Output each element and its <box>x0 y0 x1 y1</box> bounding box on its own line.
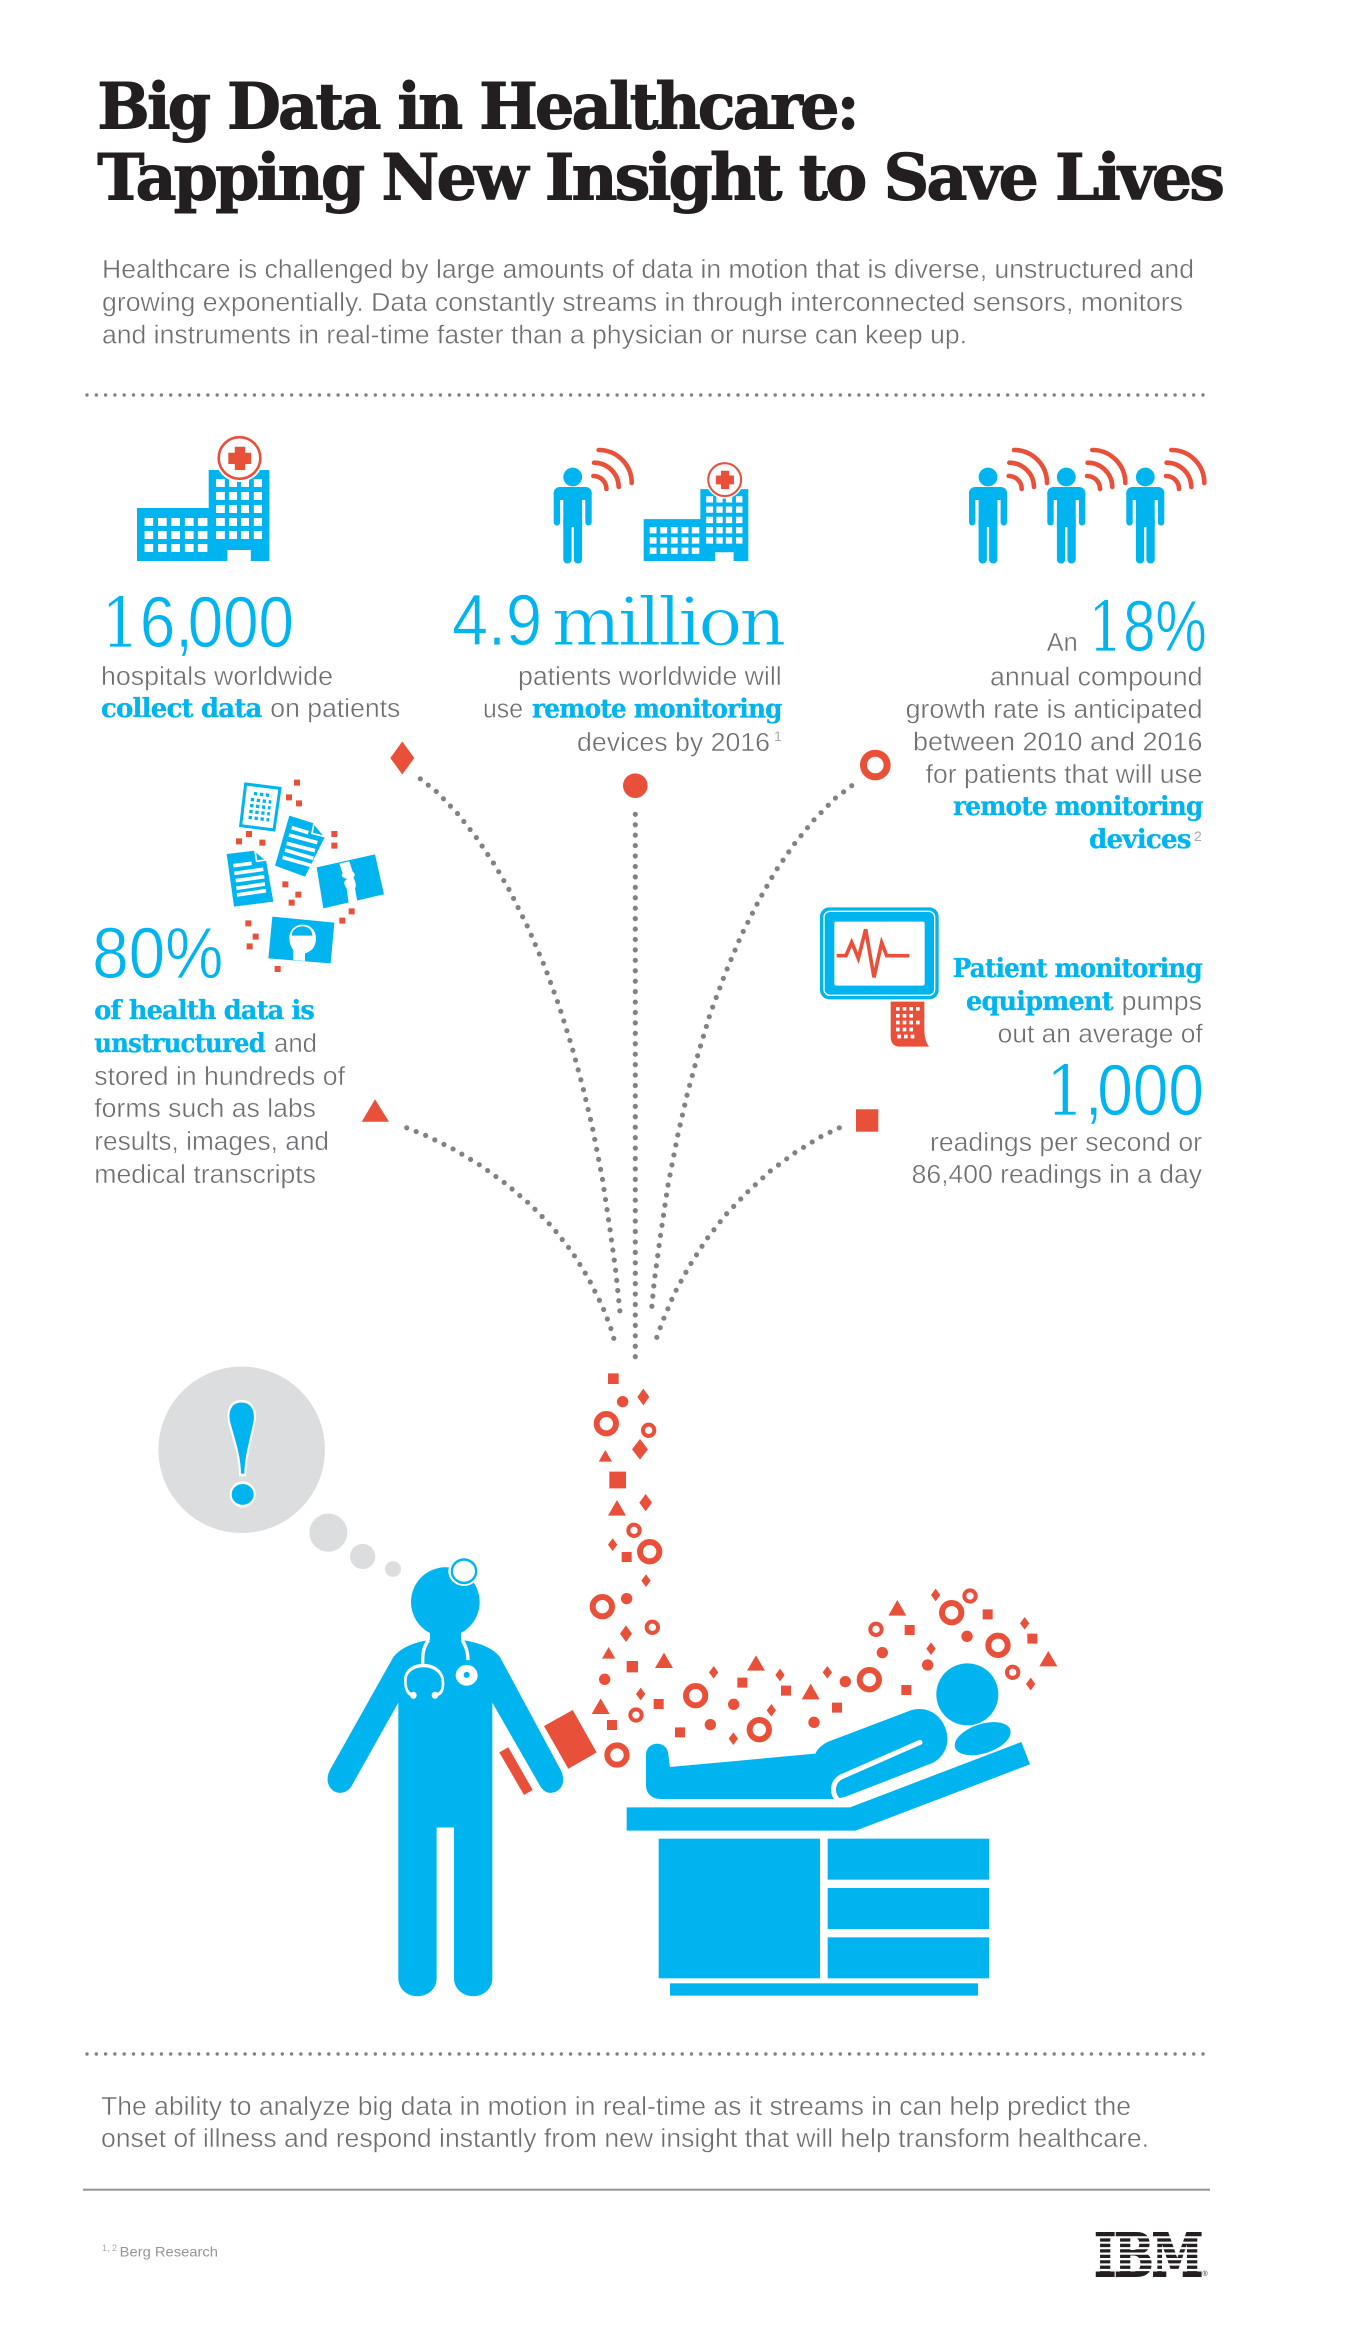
IBM logo: IBM <box>1094 2221 1201 2290</box>
text: hospitals collect data: on patients <box>270 695 400 723</box>
text: readings per second <box>912 1129 1203 1189</box>
panel: patient monitoring 1,000 readings <box>820 907 1204 1189</box>
panel: 16,000 hospitals <box>101 434 400 724</box>
intro text <box>102 256 1194 350</box>
dotted data streams <box>407 779 852 1367</box>
text: health data is unstructured: medical transcripts <box>94 1161 316 1189</box>
text: monitoring equipment pumps <box>953 954 1204 1049</box>
icon: patient monitor <box>820 907 939 1047</box>
text: monitoring equipment pumps: equipment <box>966 987 1113 1017</box>
text: health data is unstructured: of health data is <box>94 996 314 1026</box>
stat: 4.9 million <box>452 581 785 661</box>
stat: An 18% <box>1047 587 1207 668</box>
stat: An 18%: An <box>1047 629 1078 657</box>
panel: 4.9 million patients <box>452 450 785 757</box>
icon: small hospital <box>644 461 748 561</box>
stat: 4.9 million: million <box>552 584 785 661</box>
text: remote monitoring devices by 2016: remote monitoring <box>532 694 782 724</box>
stat: 1,000: 1,000 <box>1046 1051 1204 1132</box>
stat: 16,000: 16,000 <box>101 583 294 664</box>
closing text: onset of illness and respond instantly from new insight that will help transform healthcare. <box>101 2125 1149 2153</box>
intro text: and instruments in real-time faster than a physician or nurse can keep up. <box>102 322 967 350</box>
icon: three people with signal <box>969 450 1204 564</box>
text: health data is unstructured: unstructured <box>94 1029 266 1059</box>
intro text: Healthcare is challenged by large amounts of data in motion that is diverse, unstructured and <box>102 256 1194 284</box>
text: annual compound growth: 2 <box>1194 828 1202 844</box>
text: remote monitoring devices by 2016: patients worldwide will <box>518 663 782 691</box>
footnote: 1, 2 <box>102 2243 117 2253</box>
patient on exam table <box>627 1663 1030 1996</box>
text: readings per second: readings per second or <box>930 1129 1203 1157</box>
doctor figure <box>328 1556 563 1996</box>
thought bubble with exclamation mark <box>158 1367 401 1577</box>
title: Big Data in Healthcare: <box>97 69 857 144</box>
text: remote monitoring devices by 2016: use <box>483 696 523 724</box>
stream markers <box>362 742 887 1132</box>
panel: 80% unstructured data <box>92 780 384 1189</box>
IBM logo: ® <box>1202 2270 1208 2278</box>
icon: person with signal <box>554 450 632 564</box>
footnote: Berg Research <box>120 2244 218 2260</box>
text: annual compound growth: between 2010 and 2016 <box>913 729 1202 757</box>
closing text: The ability to analyze big data in motion in real-time as it streams in can help predict the <box>101 2093 1131 2121</box>
text: hospitals collect data <box>101 663 400 724</box>
red chart held by doctor <box>499 1710 597 1795</box>
text: hospitals collect data: hospitals worldwide <box>101 663 333 691</box>
text: monitoring equipment pumps: out an average of <box>998 1021 1204 1049</box>
text: health data is unstructured <box>94 996 346 1189</box>
text: annual compound growth: remote monitoring <box>953 792 1203 822</box>
text: annual compound growth: growth rate is anticipated <box>906 696 1202 724</box>
stat: 4.9 million: 4.9 <box>452 581 542 661</box>
stat: An 18%: 18% <box>1088 587 1207 668</box>
text: annual compound growth: for patients that will use <box>926 761 1202 789</box>
intro text: growing exponentially. Data constantly streams in through interconnected sensors, monitors <box>102 289 1183 317</box>
data particles <box>592 1373 1057 1765</box>
text: remote monitoring devices by 2016: 1 <box>774 728 782 744</box>
text: monitoring equipment pumps: pumps <box>1122 988 1202 1016</box>
text: remote monitoring devices by 2016 <box>483 663 782 757</box>
text: annual compound growth <box>906 664 1203 855</box>
stat: 80%: 80% <box>92 914 223 994</box>
title <box>97 69 1223 215</box>
text: readings per second: 86,400 readings in a day <box>912 1161 1202 1189</box>
closing text <box>101 2093 1149 2153</box>
text: hospitals collect data: collect data <box>101 694 263 724</box>
text: monitoring equipment pumps: Patient monitoring <box>953 954 1203 984</box>
icon: hospital <box>137 434 269 561</box>
text: health data is unstructured: and <box>274 1030 317 1058</box>
title: Tapping New Insight to Save Lives <box>97 140 1223 215</box>
icon: scattered documents <box>227 780 384 972</box>
text: health data is unstructured: stored in hundreds of <box>94 1063 346 1091</box>
text: annual compound growth: annual compound <box>990 664 1202 692</box>
text: health data is unstructured: results, images, and <box>94 1128 329 1156</box>
text: annual compound growth: devices <box>1089 825 1191 855</box>
text: health data is unstructured: forms such as labs <box>94 1095 316 1123</box>
panel: 18% growth <box>906 450 1207 855</box>
text: remote monitoring devices by 2016: devices by 2016 <box>577 729 770 757</box>
